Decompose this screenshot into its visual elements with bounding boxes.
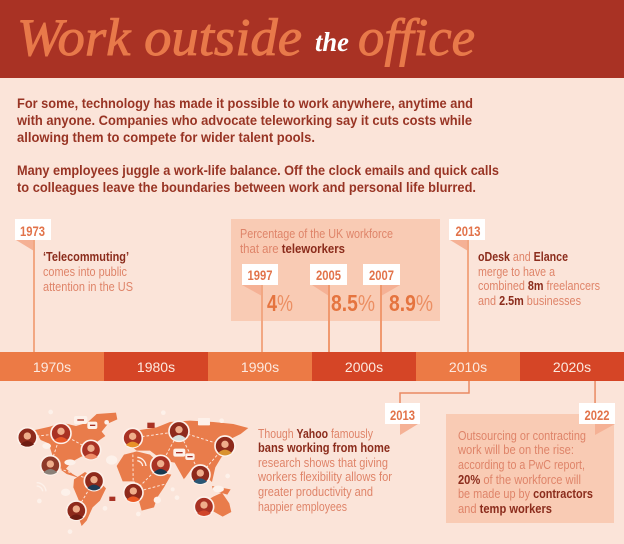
stat: 2007 xyxy=(363,264,433,352)
intro text: to colleagues leave the boundaries between work and personal life blurred. xyxy=(17,179,476,195)
panel: 2022 contractors: Outsourcing or contracting xyxy=(458,429,586,443)
wifi icons xyxy=(37,457,146,491)
intro text: allowing them to compete for wider talent pools. xyxy=(17,129,315,145)
event: 1973 telecommuting: 1973 xyxy=(20,223,45,239)
network nodes and chat bubbles xyxy=(37,410,230,534)
stat: 2005: 8.5% xyxy=(331,290,375,316)
bubble dots and small icons xyxy=(77,419,193,501)
panel: 2022 contractors: 2022 xyxy=(584,407,610,423)
intro text: with anyone. Companies who advocate teleworking say it cuts costs while xyxy=(16,112,472,128)
stat: 1997 xyxy=(242,264,293,352)
timeline bar: 1990s xyxy=(241,359,279,375)
timeline bar: 2020s xyxy=(553,359,591,375)
event: 1973 telecommuting: attention in the US xyxy=(43,280,133,294)
timeline bar: 1970s xyxy=(33,359,71,375)
avatar faces xyxy=(24,426,229,513)
timeline bar xyxy=(0,352,624,381)
intro text: For some, technology has made it possible to work anywhere, anytime and xyxy=(17,95,473,111)
network lines xyxy=(27,431,225,532)
event: 2013 Yahoo xyxy=(257,381,469,514)
panel: UK teleworkers: Percentage of the UK workforce xyxy=(240,227,393,241)
event: 2013 oDesk and Elance: merge to have a xyxy=(478,265,555,279)
event: 2013 oDesk and Elance xyxy=(449,219,600,352)
panel: 2022 contractors: according to a PwC report, xyxy=(458,458,585,472)
title xyxy=(17,9,475,67)
event: 2013 oDesk and Elance: combined 8m freelancers xyxy=(478,279,600,293)
stat: 2005: 2005 xyxy=(316,267,341,283)
event: 2013 oDesk and Elance: oDesk and Elance xyxy=(478,250,568,264)
event: 2013 Yahoo: happier employees xyxy=(258,500,347,514)
event: 2013 Yahoo: bans working from home xyxy=(258,441,390,455)
title: Work outside xyxy=(17,9,302,67)
panel: UK teleworkers xyxy=(231,219,440,352)
event: 2013 Yahoo: workers flexibility allows for xyxy=(257,470,392,484)
intro text xyxy=(16,95,499,195)
stat: 1997: 4% xyxy=(267,290,293,316)
stat: 2007: 2007 xyxy=(369,267,394,283)
header banner xyxy=(0,0,624,78)
avatar shirts xyxy=(21,435,232,520)
panel: 2022 contractors xyxy=(446,381,615,523)
event: 1973 telecommuting xyxy=(15,219,133,352)
panel: 2022 contractors: be made up by contractors xyxy=(458,487,593,501)
stat: 1997: 1997 xyxy=(248,267,273,283)
timeline bar: 1980s xyxy=(137,359,175,375)
event: 2013 oDesk and Elance: and 2.5m businesses xyxy=(478,294,581,308)
title: office xyxy=(358,9,475,67)
title: the xyxy=(315,27,349,57)
stat: 2007: 8.9% xyxy=(389,290,433,316)
event: 2013 Yahoo: research shows that giving xyxy=(258,456,388,470)
event: 2013 oDesk and Elance: 2013 xyxy=(456,223,481,239)
world map with connected workers xyxy=(18,410,248,534)
timeline bar: 2000s xyxy=(345,359,383,375)
panel: 2022 contractors: 20% of the workforce will xyxy=(458,473,581,487)
continents xyxy=(35,413,248,526)
worker avatars xyxy=(18,421,235,520)
event: 2013 Yahoo: 2013 xyxy=(390,407,415,423)
intro text: Many employees juggle a work-life balance. Off the clock emails and quick calls xyxy=(17,162,499,178)
panel: UK teleworkers: that are teleworkers xyxy=(240,242,345,256)
panel: 2022 contractors: and temp workers xyxy=(458,502,552,516)
event: 2013 Yahoo: Though Yahoo famously xyxy=(258,427,374,441)
event: 1973 telecommuting: comes into public xyxy=(43,265,127,279)
event: 2013 Yahoo: greater productivity and xyxy=(258,485,373,499)
stat: 2005 xyxy=(310,264,375,352)
event: 1973 telecommuting: ‘Telecommuting’ xyxy=(43,250,129,264)
timeline bar: 2010s xyxy=(449,359,487,375)
panel: 2022 contractors: work will be on the rise: xyxy=(457,443,574,457)
